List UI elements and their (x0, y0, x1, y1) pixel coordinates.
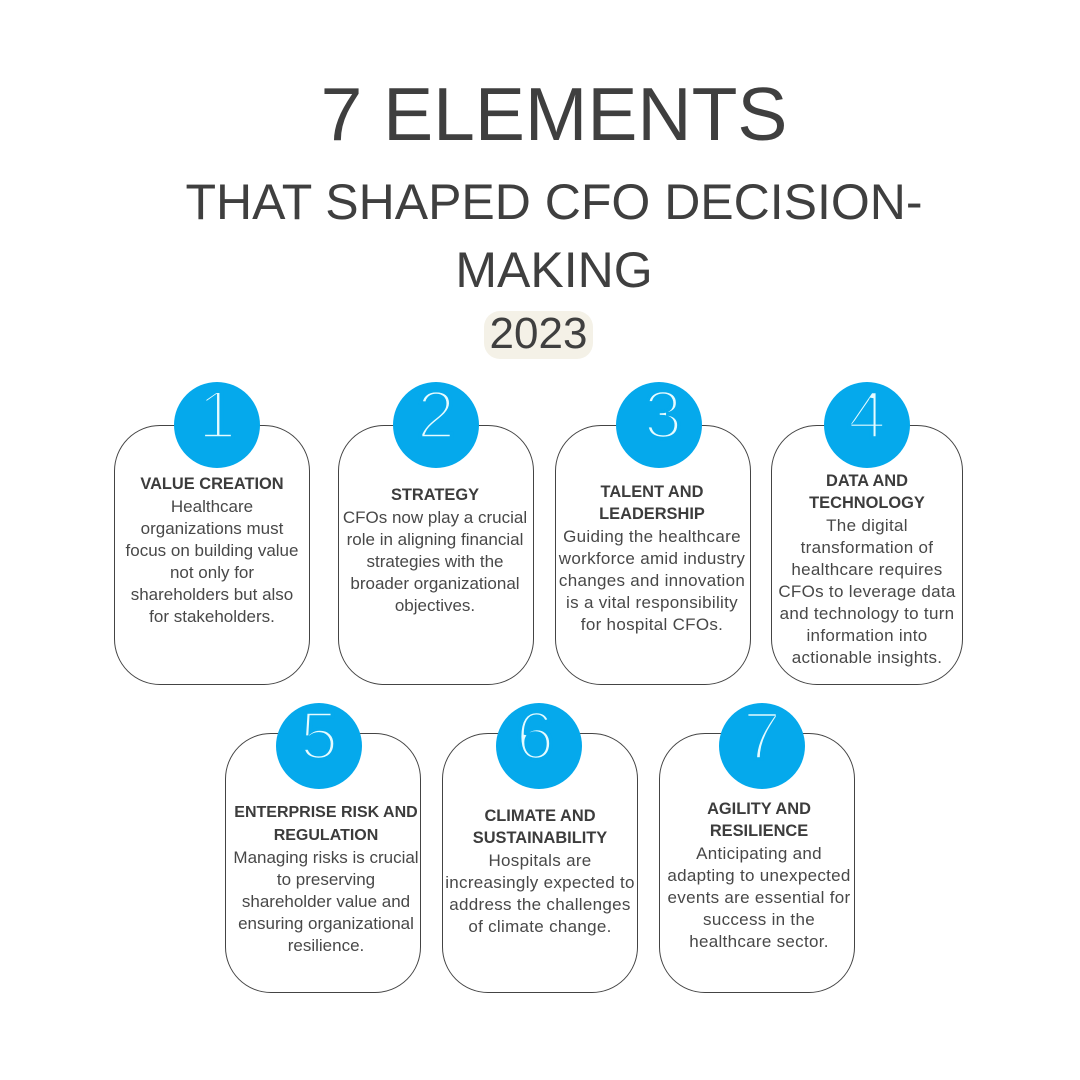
number 3: 3 (644, 377, 682, 453)
text: strategy: STRATEGY (391, 486, 479, 504)
number 6 (496, 703, 582, 789)
text: risk: ENTERPRISE RISK AND (234, 804, 418, 821)
number 1 (174, 382, 260, 468)
text: climate: SUSTAINABILITY (473, 829, 607, 847)
number 5: 5 (300, 698, 338, 774)
text: talent: changes and innovation (559, 571, 745, 590)
text: value creation: for stakeholders. (149, 607, 275, 626)
number 4 (824, 382, 910, 468)
text: agility: adapting to unexpected (667, 866, 851, 885)
number 2: 2 (417, 377, 455, 453)
text: climate: CLIMATE AND (484, 807, 596, 825)
text: value creation: focus on building value (126, 541, 298, 560)
year badge: 2023 (490, 309, 587, 358)
panel: value creation (114, 377, 310, 685)
text: talent: workforce amid industry (559, 549, 745, 568)
text: data: TECHNOLOGY (809, 494, 925, 512)
text: talent: is a vital responsibility (566, 593, 738, 612)
number 3 (616, 382, 702, 468)
text: risk: ensuring organizational (238, 914, 414, 933)
text: agility: AGILITY AND (707, 800, 811, 818)
text: risk: Managing risks is crucial (233, 848, 419, 867)
text: value creation: VALUE CREATION (140, 475, 284, 493)
text: climate: of climate change. (468, 917, 612, 936)
text: strategy (343, 486, 527, 615)
text: data: information into (806, 626, 928, 645)
text: agility: success in the (703, 910, 815, 929)
text: value creation: not only for (170, 563, 254, 582)
panel: enterprise risk (225, 698, 421, 993)
number 2 (393, 382, 479, 468)
text: value creation (126, 475, 298, 626)
text: data: healthcare requires (791, 560, 943, 579)
panel: strategy (338, 377, 534, 685)
text: climate: Hospitals are (488, 851, 592, 870)
panel: talent and leadership (555, 377, 751, 685)
text: data: CFOs to leverage data (778, 582, 956, 601)
text: value creation: Healthcare (171, 497, 253, 516)
text: talent: for hospital CFOs. (581, 615, 723, 634)
text: agility: healthcare sector. (689, 932, 829, 951)
panel: agility (659, 698, 855, 993)
text: data: DATA AND (826, 472, 908, 490)
number 1: 1 (198, 377, 236, 453)
text: data (778, 472, 956, 667)
text: climate: increasingly expected to (445, 873, 635, 892)
text: strategy: role in aligning financial (347, 530, 523, 549)
text: risk: shareholder value and (242, 892, 410, 911)
text: risk: to preserving (277, 870, 375, 889)
text: risk: resilience. (288, 936, 364, 955)
subtitle: THAT SHAPED CFO DECISION- (185, 174, 923, 230)
text: agility: events are essential for (668, 888, 850, 907)
text: talent: LEADERSHIP (599, 505, 705, 523)
text: agility: RESILIENCE (710, 822, 808, 840)
text: data: transformation of (801, 538, 933, 557)
text: talent (558, 483, 745, 634)
text: data: The digital (826, 516, 908, 535)
number 7 (719, 703, 805, 789)
text: data: actionable insights. (792, 648, 942, 667)
text: climate (445, 807, 635, 936)
text: value creation: organizations must (141, 519, 283, 538)
panel: data and technology (771, 377, 963, 685)
text: agility (667, 800, 851, 951)
text: climate: address the challenges (449, 895, 631, 914)
number 7: 7 (743, 698, 781, 774)
text: risk (233, 804, 419, 955)
subtitle: MAKING (455, 242, 653, 298)
text: agility: Anticipating and (696, 844, 822, 863)
number 6: 6 (516, 698, 554, 774)
text: strategy: broader organizational (350, 574, 520, 593)
number 4: 4 (848, 377, 886, 453)
text: strategy: CFOs now play a crucial (343, 508, 527, 527)
text: strategy: strategies with the (366, 552, 504, 571)
text: value creation: shareholders but also (131, 585, 293, 604)
panel: climate (442, 698, 638, 993)
text: strategy: objectives. (395, 596, 475, 615)
text: talent: Guiding the healthcare (563, 527, 741, 546)
text: talent: TALENT AND (601, 483, 703, 501)
number 5 (276, 703, 362, 789)
text: data: and technology to turn (780, 604, 954, 623)
title: 7 ELEMENTS (321, 72, 787, 156)
text: risk: REGULATION (274, 827, 378, 844)
subtitle (185, 174, 923, 298)
